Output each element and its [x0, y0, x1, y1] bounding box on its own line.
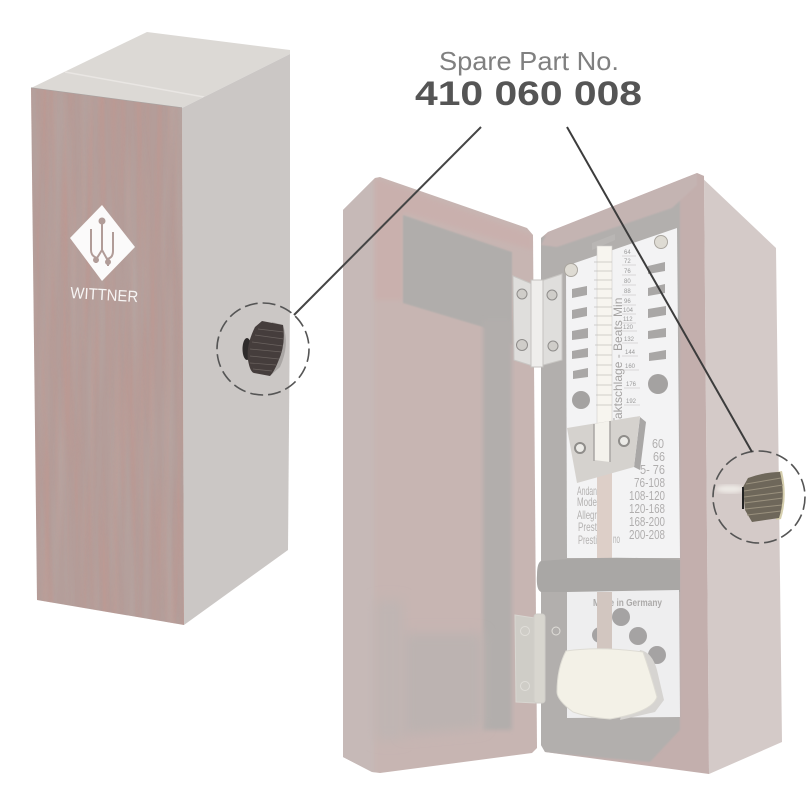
right thumb knob: [716, 471, 785, 522]
knob cap: [776, 471, 785, 520]
open case lid: [338, 170, 537, 780]
body front frame: [541, 173, 709, 774]
callout circle right: [713, 451, 805, 543]
left plate slots: [572, 286, 588, 379]
part number: 410 060 008: [415, 75, 642, 113]
tempo names: Andan: [577, 484, 597, 498]
plate round holes: [572, 374, 668, 409]
lid left inner shadow: [375, 600, 403, 740]
tempo ranges: 120-168: [629, 502, 665, 516]
lid outline: [343, 177, 537, 773]
sliding weight: [567, 416, 640, 483]
logo wordmark: WITTNER: [70, 285, 139, 306]
case front face with wood grain: [25, 85, 190, 630]
closed metronome case: [25, 32, 290, 630]
knob cap: [270, 322, 286, 376]
beats per minute numerals: 120: [623, 325, 634, 331]
slider notch line: [594, 421, 610, 462]
tempo ranges: 5- 76: [640, 463, 665, 477]
plate background: [566, 228, 680, 558]
slider notch: [594, 421, 610, 462]
beats per minute numerals: 72: [624, 259, 631, 265]
beats per minute numerals: 80: [624, 279, 631, 285]
pendulum bob shadow: [620, 650, 664, 720]
pendulum rod upper: [597, 470, 612, 558]
hinge barrel: [534, 614, 545, 703]
right plate slots: [648, 262, 666, 361]
logo diamond: [70, 205, 135, 281]
beats per minute numerals: 132: [624, 337, 635, 343]
lid right recess: [483, 320, 512, 730]
open metronome body: [537, 173, 782, 774]
knob dark edge: [742, 487, 744, 509]
hinge barrel: [531, 280, 543, 367]
beats per minute numerals: 64: [624, 250, 631, 256]
knob knurling: [744, 478, 783, 515]
hinge plate: [513, 274, 562, 367]
tempo ranges: [629, 437, 665, 542]
case top face: [31, 32, 290, 108]
left thumb knob: [242, 321, 286, 376]
tempo ranges: 66: [653, 450, 665, 464]
tempo ranges: 168-200: [629, 515, 665, 529]
tempo ranges: 108-120: [629, 489, 665, 503]
tempo names: Prest: [578, 520, 597, 534]
dark centre band: [537, 558, 680, 592]
tempo ranges: 76-108: [634, 476, 665, 490]
numeral rules: [622, 256, 640, 405]
beat scale strip: [597, 246, 612, 436]
tempo names: Allegr: [577, 508, 597, 522]
hinge screws: [520, 626, 560, 690]
inner top frame: [541, 173, 697, 247]
beats per minute numerals: 160: [625, 364, 636, 370]
slider shadow: [634, 417, 646, 470]
tempo names: no: [613, 532, 620, 546]
beats per minute numerals: [623, 250, 637, 405]
pendulum rod lower: [597, 592, 612, 650]
beats per minute numerals: 112: [623, 317, 633, 323]
tuning fork mark: [91, 218, 113, 266]
knob body: [743, 472, 783, 522]
made in germany label: Made in Germany: [593, 597, 662, 609]
tempo names: [577, 484, 620, 547]
lower plate: [557, 590, 680, 720]
lid top frame tint: [375, 178, 532, 300]
heading: spare part number: [415, 46, 642, 113]
beats per minute numerals: 192: [626, 399, 637, 405]
scale top shadow: [592, 234, 615, 250]
lid outer edge: [343, 180, 374, 772]
tempo ranges: 60: [652, 437, 664, 451]
case right side face: [182, 54, 290, 625]
beats per minute numerals: 104: [623, 308, 634, 314]
tempo names: Mode: [577, 495, 597, 509]
hinge left leaf: [515, 615, 535, 703]
pendulum bob: [557, 649, 657, 719]
beats per minute numerals: 176: [626, 382, 637, 388]
bottom hinge: [515, 614, 560, 703]
lower plate holes: [592, 608, 666, 664]
rotated scale caption: Taktschlage - Beats Min: [611, 298, 625, 425]
leader line to left knob: [294, 127, 481, 315]
knob body: [248, 321, 284, 376]
beats per minute numerals: 88: [624, 289, 631, 295]
tempo ranges: 200-208: [629, 528, 665, 542]
callout circle left: [217, 303, 309, 395]
label: spare part no: Spare Part No.: [439, 46, 619, 76]
knob knurling: [250, 329, 284, 371]
knob highlight: [716, 485, 744, 493]
beats per minute numerals: 96: [624, 299, 631, 305]
WITTNER logo: [70, 205, 139, 306]
knob stem: [242, 338, 252, 360]
scale plate: [564, 228, 680, 558]
lid upper recess: [402, 215, 512, 326]
top hinge: [513, 274, 562, 367]
body interior cavity: [538, 200, 680, 762]
beats per minute numerals: 76: [624, 269, 631, 275]
beats per minute numerals: 144: [625, 350, 636, 356]
lower plate background: [567, 590, 680, 718]
lid lower recess: [408, 636, 479, 730]
scale tick marks: [594, 262, 612, 405]
hinge screws: [516, 289, 558, 351]
plate screws: [564, 236, 668, 276]
body right side face: [697, 173, 782, 774]
leader line to right knob: [567, 127, 752, 452]
slider screws: [575, 436, 629, 453]
tempo names: Presti: [578, 533, 597, 547]
